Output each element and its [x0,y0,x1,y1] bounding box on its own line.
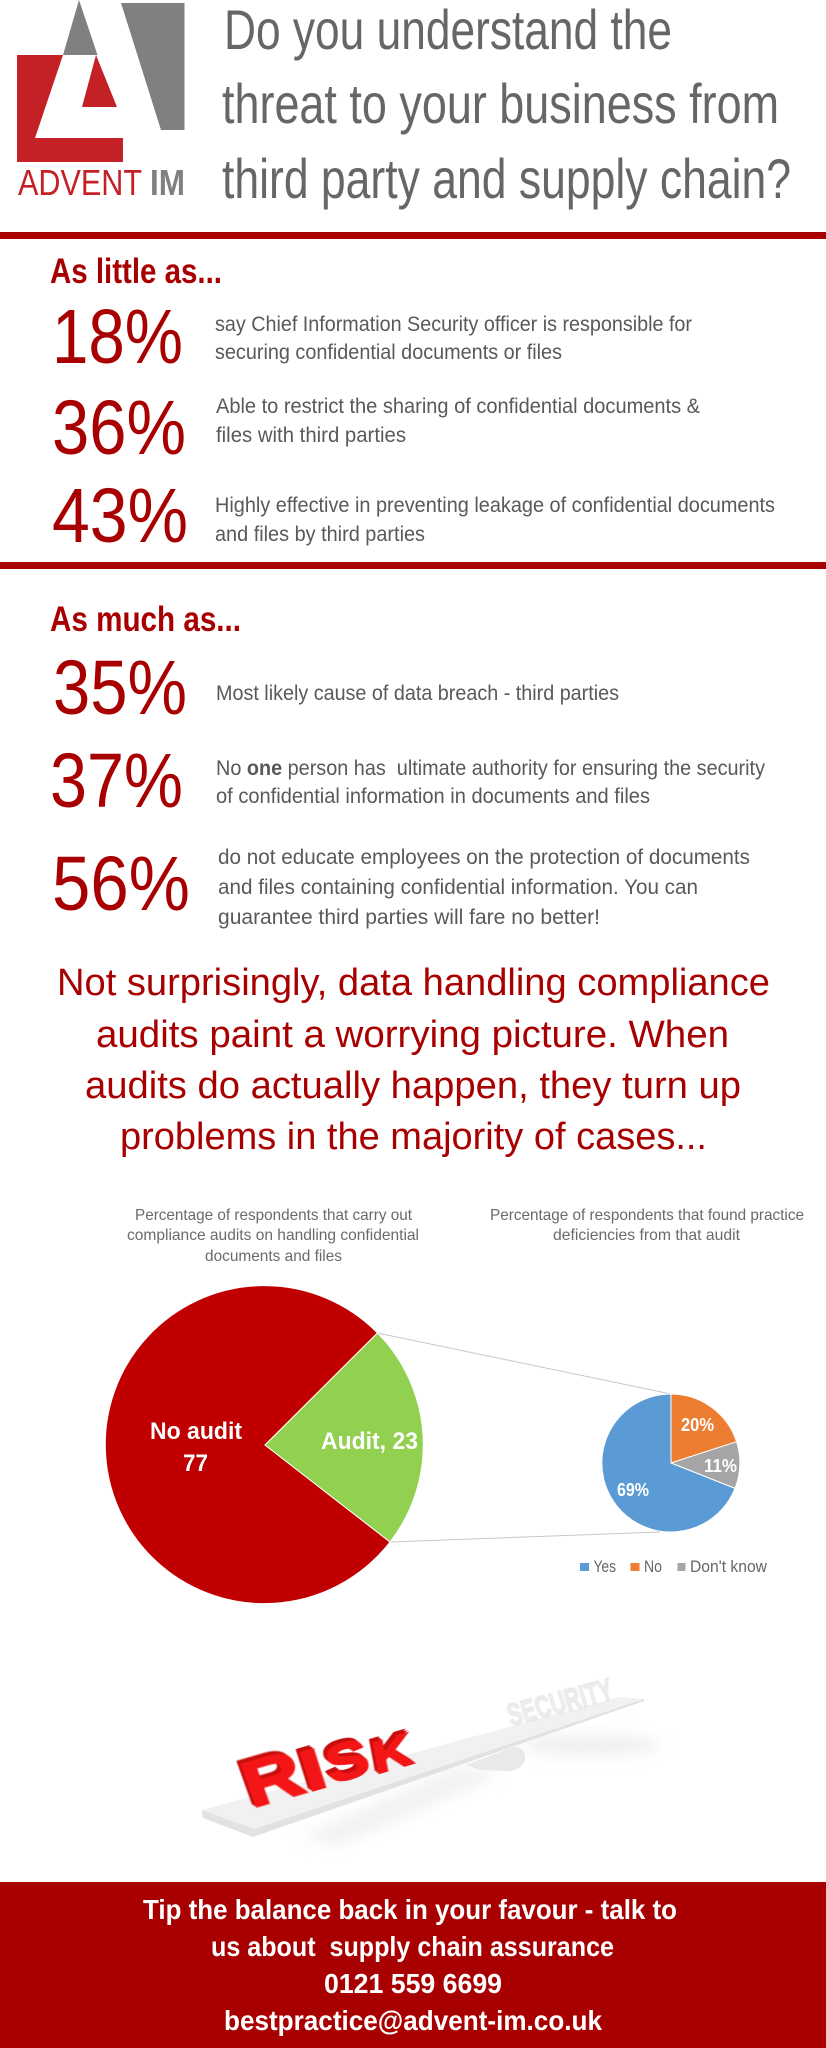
callout: audit statement: audits do actually happen, they turn up [85,1065,741,1107]
legend: No [644,1558,662,1576]
stat: 18% [52,294,692,380]
logo: Advent IM: IM [150,162,185,203]
pie chart: deficiencies found: 69% [617,1480,649,1500]
stat: 56%: do not educate employees on the protection of documents [218,846,750,869]
stat: 56%: 56% [52,841,190,927]
chart title: audits carried out: documents and files [205,1248,342,1265]
pie chart: deficiencies found [602,1394,740,1532]
pie chart: audit vs no audit: No audit [150,1418,242,1445]
pie chart: audit vs no audit: Audit, 23 [321,1428,418,1455]
chart title: practice deficiencies: Percentage of respondents that found practice [490,1207,804,1224]
chart title: practice deficiencies: deficiencies from that audit [553,1227,741,1244]
fulcrum [466,1747,525,1771]
stat: 37%: 37% [50,738,183,824]
callout: audit statement: problems in the majority of cases... [120,1116,707,1158]
callout: audit statement: Not surprisingly, data handling compliance [57,962,770,1004]
stat: 36%: Able to restrict the sharing of confidential documents & [216,395,700,418]
stat: 43%: Highly effective in preventing leakage of confidential documents [215,494,775,517]
stat: 37%: of confidential information in documents and files [216,785,650,808]
word: security: SECURITY [503,1672,617,1733]
chart title: audits carried out: Percentage of respondents that carry out [135,1207,413,1224]
stat: 43%: 43% [52,473,188,559]
logo: Advent IM: ADVENT [18,162,142,203]
title [222,0,791,210]
panel: call to action: bestpractice@advent-im.co.uk [224,2005,602,2036]
stat: 56%: guarantee third parties will fare no better! [218,906,600,929]
pie chart: audit vs no audit: 77 [183,1450,208,1477]
stat: 37% [50,738,765,824]
panel: call to action: us about supply chain assurance [211,1931,614,1962]
stat: 18%: securing confidential documents or files [215,341,562,364]
panel: as little as [50,252,775,559]
stat: 18%: 18% [52,294,183,380]
stat: 36%: files with third parties [216,424,406,447]
stat: 35% [53,645,619,731]
chart title: audits carried out [127,1207,419,1265]
stat: 36%: 36% [52,385,186,471]
stat: 37%: No one person has ultimate authority for ensuring the security [216,757,765,780]
word: risk: S [320,1728,375,1795]
stat: 36% [52,385,700,471]
chart title: practice deficiencies [490,1207,804,1244]
stat: 18%: say Chief Information Security officer is responsible for [215,313,692,336]
stat: 35%: Most likely cause of data breach - third parties [216,682,619,705]
callout: audit statement [57,962,770,1158]
connector lines between pies [378,1333,671,1542]
logo: Advent IM [17,0,185,203]
stat: 56%: and files containing confidential information. You can [218,876,698,899]
heading: as little as: As little as... [50,252,222,291]
panel: as much as [50,600,765,929]
panel: call to action: Tip the balance back in your favour - talk to [143,1894,677,1925]
chart title: audits carried out: compliance audits on handling confidential [127,1227,419,1244]
stat: 35%: 35% [53,645,187,731]
stat: 43%: and files by third parties [215,523,425,546]
panel: call to action [0,1882,826,2048]
word: risk [232,1723,416,1821]
legend [580,1558,767,1576]
stat: 56% [52,841,750,929]
legend: Yes [594,1558,616,1576]
callout: audit statement: audits paint a worrying picture. When [96,1014,729,1056]
pie chart: deficiencies found: 20% [681,1415,714,1435]
plank [202,1697,644,1829]
illustration: risk outweighs security seesaw [202,1672,660,1845]
word: risk: R [232,1737,313,1821]
legend: Don't know [690,1558,767,1576]
heading: as much as: As much as... [50,600,241,639]
word: risk: K [368,1723,416,1783]
pie chart: audit vs no audit [105,1286,423,1604]
stat: 43% [52,473,775,559]
word: risk: I [292,1735,334,1804]
panel: call to action: 0121 559 6699 [324,1968,502,1999]
pie chart: deficiencies found: 11% [704,1456,737,1476]
